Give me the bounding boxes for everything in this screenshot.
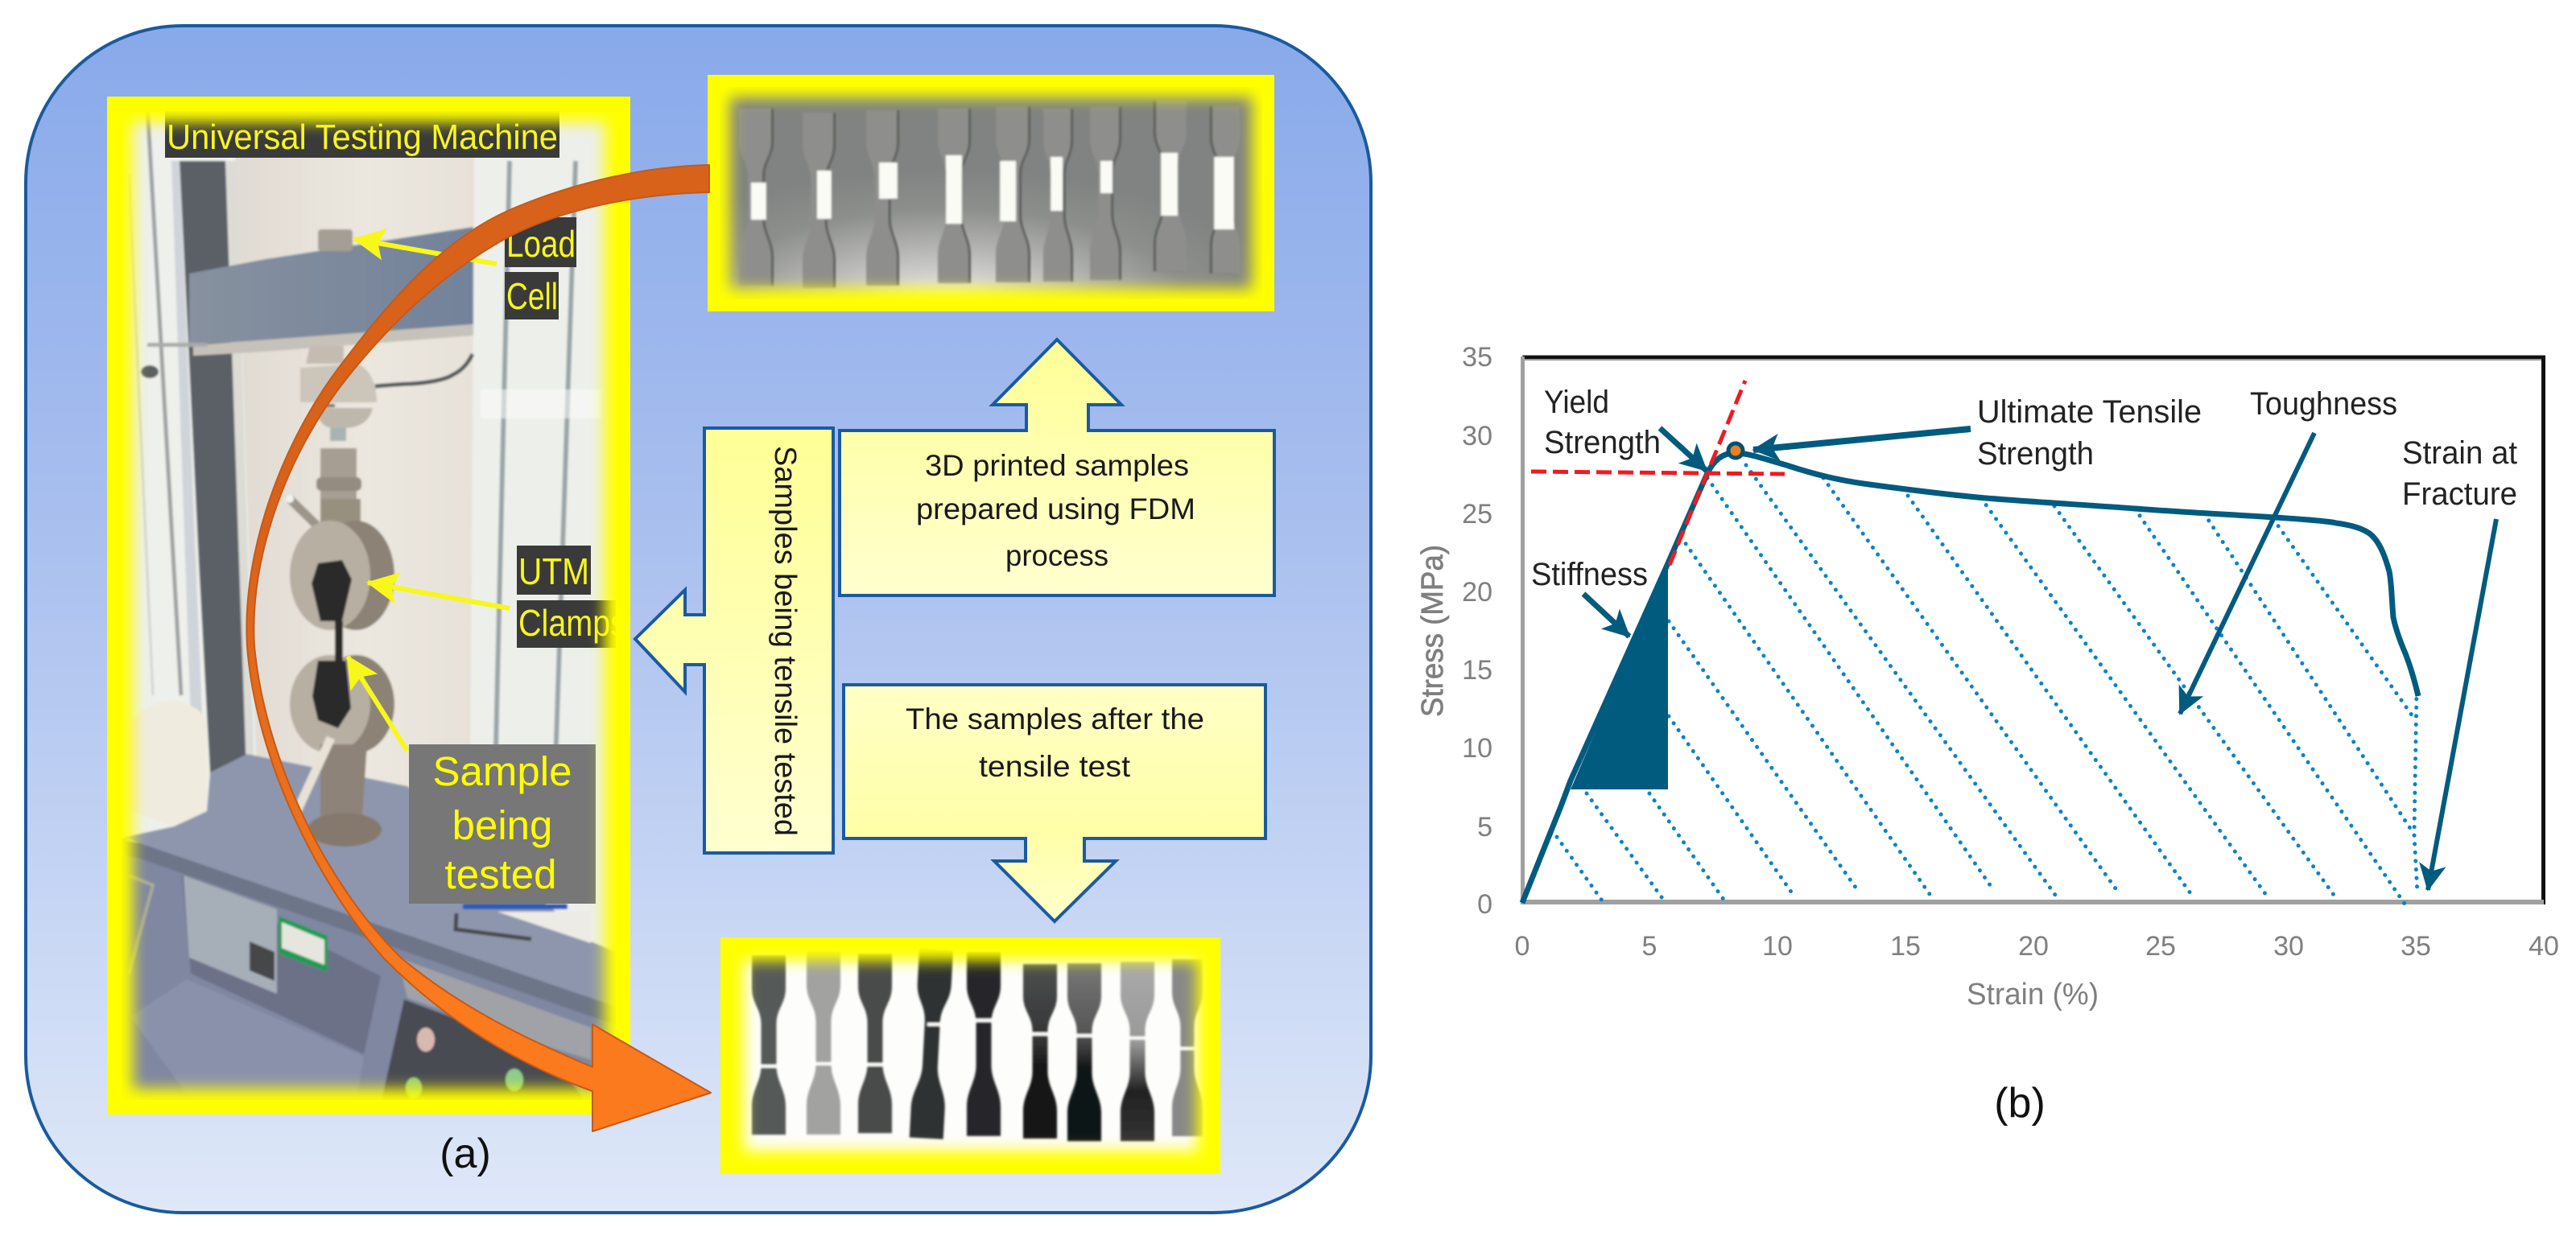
arrow: sample pointer [348,657,407,751]
y axis tick labels: 25 [1462,499,1492,529]
x axis tick labels: 30 [2273,931,2304,962]
y axis tick labels: 15 [1462,655,1492,686]
y axis title: Stress (MPa) [1416,545,1450,717]
label: Sample being tested: tested [445,851,556,897]
UTS marker [1728,443,1743,458]
text: 3D printed samples: 3D printed samples [925,449,1189,482]
arrow: clamps pointer [368,583,510,608]
label: Clamps [517,600,616,648]
stiffness triangle [1571,563,1668,789]
yield red dashed lines [1531,381,1785,565]
plot frame [1521,355,2545,904]
arrow box: 3D printed samples [840,340,1274,595]
x axis tick labels: 5 [1642,931,1657,962]
x axis tick labels: 0 [1515,931,1530,962]
photo: universal testing machine [107,97,630,1114]
toughness hatch [1557,465,2417,904]
arrow: yield strength [1660,428,1707,471]
x axis tick labels: 35 [2401,931,2431,962]
label: Fracture: Fracture [2402,476,2517,512]
y axis tick labels [1462,342,1492,920]
arrow box: samples being tensile tested [635,428,833,853]
label: Sample being tested: being [452,802,552,848]
x axis tick labels: 15 [1890,931,1921,962]
text: samples being tensile tested: Samples being tensile tested [768,446,802,836]
x axis title: Strain (%) [1967,978,2099,1011]
label: UTM: UTM [518,550,589,592]
x axis tick labels: 10 [1762,931,1793,962]
arrow: strain at fracture [2428,519,2496,890]
y axis tick labels: 35 [1462,342,1492,373]
panel (a): test setup background [26,26,1371,1213]
y axis tick labels: 30 [1462,421,1492,451]
arrow: toughness [2180,433,2314,714]
arrow: load cell pointer [354,239,497,264]
text: process: process [1005,539,1108,572]
photo: printed samples before testing [708,75,1274,311]
arrow: curved orange flow arrow [246,165,711,1131]
label: Sample being tested: Sample [433,748,572,794]
photo: samples after testing [720,937,1220,1174]
x axis tick labels: 40 [2529,931,2559,962]
x axis tick labels: 20 [2018,931,2049,962]
arrow: ultimate tensile strength [1753,429,1971,450]
caption (b): (b) [1994,1080,2046,1127]
label: Strain at: Strain at [2402,435,2517,471]
label: Ultimate Tensile: Ultimate Tensile [1977,394,2202,430]
label: Cell: Cell [506,275,558,317]
label: Load: Load [506,223,576,265]
label: Clamps: Clamps [518,602,626,644]
label: Stiffness: Stiffness [1531,557,1648,592]
label: Yield: Yield [1544,385,1609,420]
caption (a): (a) [440,1131,491,1177]
arrow box: samples after the tensile test [844,685,1265,921]
y axis tick labels: 0 [1477,889,1492,920]
y axis tick labels: 5 [1477,812,1492,843]
text: prepared using FDM: prepared using FDM [916,492,1195,525]
label: Strength (yield): Strength [1544,425,1661,460]
x axis tick labels: 25 [2145,931,2176,962]
y axis tick labels: 10 [1462,733,1492,764]
label: Strength (UTS): Strength [1977,436,2094,472]
label: Universal Testing Machine: Universal Testing Machine [167,117,558,157]
y axis tick labels: 20 [1462,577,1492,608]
arrow: stiffness [1583,594,1629,637]
label: Sample being tested [409,744,596,904]
label: Toughness: Toughness [2250,386,2397,422]
stress-strain curve [1522,453,2418,903]
text: The samples after the: The samples after the [906,702,1204,735]
chart: stress-strain curve [1416,342,2559,1011]
text: tensile test: tensile test [979,750,1131,783]
x axis tick labels [1515,931,2559,962]
